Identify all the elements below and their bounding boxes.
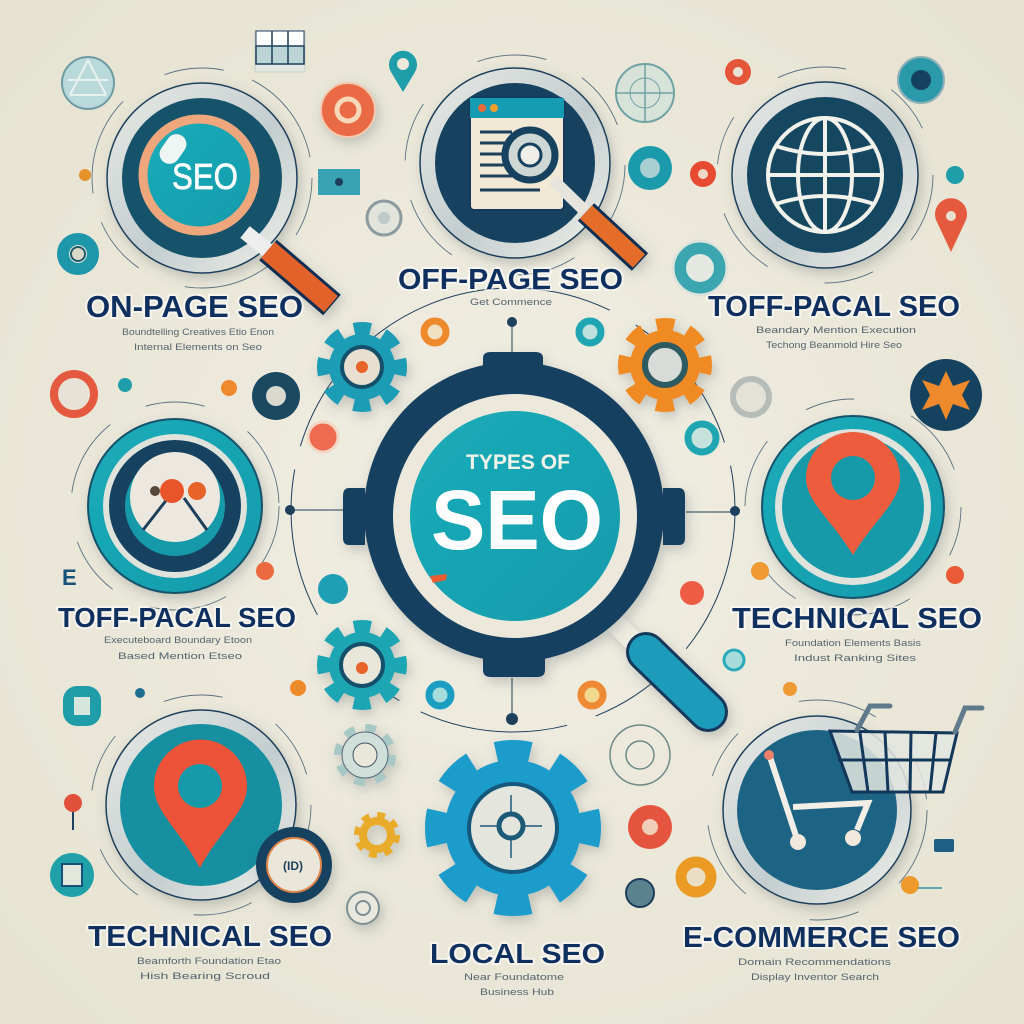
badge: orange ring top xyxy=(424,321,446,343)
gear: pale small xyxy=(347,892,379,924)
badge: teal donut xyxy=(63,239,93,269)
description: local SEO: Business Hub xyxy=(480,987,554,998)
badge: red square disc xyxy=(628,805,672,849)
heading: lower left SEO: TECHNICAL SEO xyxy=(88,921,332,953)
icon: on-page magnifier: SEO xyxy=(172,156,238,197)
badge: teal small xyxy=(118,378,132,392)
description: upper right SEO: Beandary Mention Execution xyxy=(756,325,916,336)
description: middle left SEO: Based Mention Etseo xyxy=(118,651,242,662)
badge: red left xyxy=(256,562,274,580)
title: SEO: SEO xyxy=(431,473,603,567)
badge: red right xyxy=(680,581,704,605)
description: local SEO: Near Foundatome xyxy=(464,972,564,983)
badge: silver pin xyxy=(367,201,401,235)
description: middle right SEO: Indust Ranking Sites xyxy=(794,653,916,664)
description: upper right SEO: Techong Beanmold Hire Seo xyxy=(766,340,902,351)
badge: orange dot right xyxy=(783,682,797,696)
badge: red pin left xyxy=(64,794,82,830)
magnifier handle xyxy=(612,620,708,712)
description: on-page SEO: Boundtelling Creatives Etio Enon xyxy=(122,327,274,338)
badge: silver teal ring xyxy=(673,241,727,295)
badge: teal ring bottom xyxy=(429,684,451,706)
decorative badges xyxy=(50,51,982,907)
badge: red ring xyxy=(690,161,716,187)
gear: pale outline xyxy=(339,729,391,781)
badge: teal rounded xyxy=(63,686,101,726)
badge: orange ring large xyxy=(681,862,711,892)
badge: blue glyph lower right xyxy=(934,839,954,852)
badge: silver ring xyxy=(733,379,769,415)
heading: upper right SEO: TOFF-PACAL SEO xyxy=(708,291,960,323)
panel: local SEO xyxy=(430,754,605,998)
badge: orange right xyxy=(751,562,769,580)
icon: off-page browser and magnifier xyxy=(420,68,640,262)
description: off-page SEO: Get Commence xyxy=(470,297,552,308)
icon: dark badge: (ID) xyxy=(283,859,303,873)
gears xyxy=(325,326,704,924)
description: middle left SEO: Executeboard Boundary Etoon xyxy=(104,635,252,646)
panel: on-page SEO xyxy=(86,83,332,353)
badge: compass xyxy=(616,64,674,122)
icon: calendar table xyxy=(255,31,305,72)
icon: globe xyxy=(732,82,918,268)
panel: middle left SEO xyxy=(58,419,296,662)
icon: shopping cart xyxy=(764,706,982,850)
badge: red mid xyxy=(308,422,338,452)
gear: lower left teal xyxy=(325,628,399,702)
description: lower left SEO: Beamforth Foundation Etao xyxy=(137,956,281,967)
badge: orange small xyxy=(221,380,237,396)
gear: small yellow xyxy=(358,816,396,854)
heading: middle right SEO: TECHNICAL SEO xyxy=(732,603,982,635)
icon: dark badge xyxy=(256,827,332,903)
badge: navy dot xyxy=(135,688,145,698)
badge: star disc xyxy=(910,359,982,431)
badge: teal left xyxy=(318,574,348,604)
central magnifier: types of SEO xyxy=(343,352,708,712)
icon: e-commerce ring xyxy=(723,716,911,904)
badge: teal tag xyxy=(318,169,360,195)
panel: off-page SEO xyxy=(398,68,640,308)
badge: orange ring bottom xyxy=(581,684,603,706)
icon: pale globe badge xyxy=(62,57,114,109)
badge: teal dark disc xyxy=(898,57,944,103)
icon: on-page magnifier xyxy=(107,83,332,305)
badge: dark ring xyxy=(252,372,300,420)
badge: blue glyph: E xyxy=(62,565,77,590)
panel: e-commerce SEO xyxy=(683,706,982,983)
description: e-commerce SEO: Display Inventor Search xyxy=(751,972,879,983)
badge: small teal dot xyxy=(946,166,964,184)
description: e-commerce SEO: Domain Recommendations xyxy=(738,957,891,968)
badge: red far right xyxy=(946,566,964,584)
badge: orange disc xyxy=(321,83,375,137)
magnifier body xyxy=(343,352,685,677)
title: types of: TYPES OF xyxy=(466,451,570,474)
heading: on-page SEO: ON-PAGE SEO xyxy=(86,289,303,324)
icon: target with dots xyxy=(88,419,262,593)
badge: teal ring top xyxy=(579,321,601,343)
description: on-page SEO: Internal Elements on Seo xyxy=(134,342,262,353)
gear: upper right orange xyxy=(626,326,704,404)
heading: e-commerce SEO: E-COMMERCE SEO xyxy=(683,922,960,954)
badge: teal right small xyxy=(724,650,744,670)
description: middle right SEO: Foundation Elements Basis xyxy=(785,638,921,649)
badge: teal disc xyxy=(628,146,672,190)
badge: orange dot xyxy=(290,680,306,696)
badge: teal mid xyxy=(688,424,716,452)
icon: large blue gear xyxy=(439,754,587,902)
panel: middle right SEO xyxy=(732,416,982,664)
icon: red location pin xyxy=(106,710,296,900)
badge: teal pin xyxy=(389,51,417,92)
connector lines xyxy=(71,55,961,920)
badge: red marker xyxy=(725,59,751,85)
panel: upper right SEO xyxy=(708,82,960,351)
gear: upper left teal xyxy=(325,330,399,404)
heading: middle left SEO: TOFF-PACAL SEO xyxy=(58,602,296,633)
heading: local SEO: LOCAL SEO xyxy=(430,938,605,969)
description: lower left SEO: Hish Bearing Scroud xyxy=(140,971,270,982)
badge: teal square xyxy=(50,853,94,897)
badge: red disc left xyxy=(54,374,94,414)
icon: teal location pin xyxy=(762,416,944,598)
badge: orange pin right xyxy=(901,876,942,894)
badge: red pin xyxy=(935,198,967,252)
panel: lower left SEO xyxy=(88,710,332,982)
badge: dark pin xyxy=(626,879,654,907)
heading: off-page SEO: OFF-PAGE SEO xyxy=(398,264,623,296)
badge: pale target xyxy=(610,725,670,785)
badge: orange node xyxy=(79,169,91,181)
